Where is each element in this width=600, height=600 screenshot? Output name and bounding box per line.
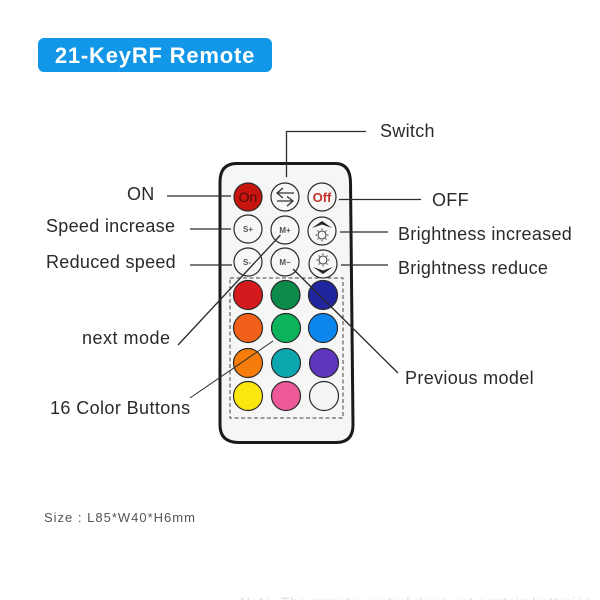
label: 16 Color Buttons: 16 Color Buttons <box>50 398 190 418</box>
label: Brightness increased: Brightness increased <box>398 224 572 244</box>
button labels: M− <box>279 258 291 267</box>
remote body <box>220 164 353 442</box>
function buttons <box>234 183 337 278</box>
label: OFF: OFF <box>432 190 469 210</box>
button labels: S+ <box>243 225 253 234</box>
label: Brightness reduce: Brightness reduce <box>398 258 548 278</box>
label: Speed increase: Speed increase <box>46 216 175 236</box>
label: next mode: next mode <box>82 328 171 348</box>
size note: Size : L85*W40*H6mm <box>44 510 196 525</box>
button labels: Off <box>313 190 332 205</box>
label: ON: ON <box>127 184 155 204</box>
label: Previous model: Previous model <box>405 368 534 388</box>
dashed color button frame <box>230 278 343 418</box>
button labels <box>239 189 332 267</box>
leader lines <box>167 132 421 398</box>
icon: brightness down <box>313 254 333 274</box>
button labels: On <box>239 189 257 205</box>
label: Reduced speed: Reduced speed <box>46 252 176 272</box>
title badge <box>38 38 272 72</box>
icon: brightness up <box>312 221 332 242</box>
button labels: M+ <box>279 226 291 235</box>
icon: switch arrows <box>277 188 294 206</box>
color buttons <box>234 280 338 410</box>
title badge: 21-KeyRF Remote <box>55 43 255 68</box>
button labels: S- <box>243 258 251 267</box>
label: Switch: Switch <box>380 121 435 141</box>
